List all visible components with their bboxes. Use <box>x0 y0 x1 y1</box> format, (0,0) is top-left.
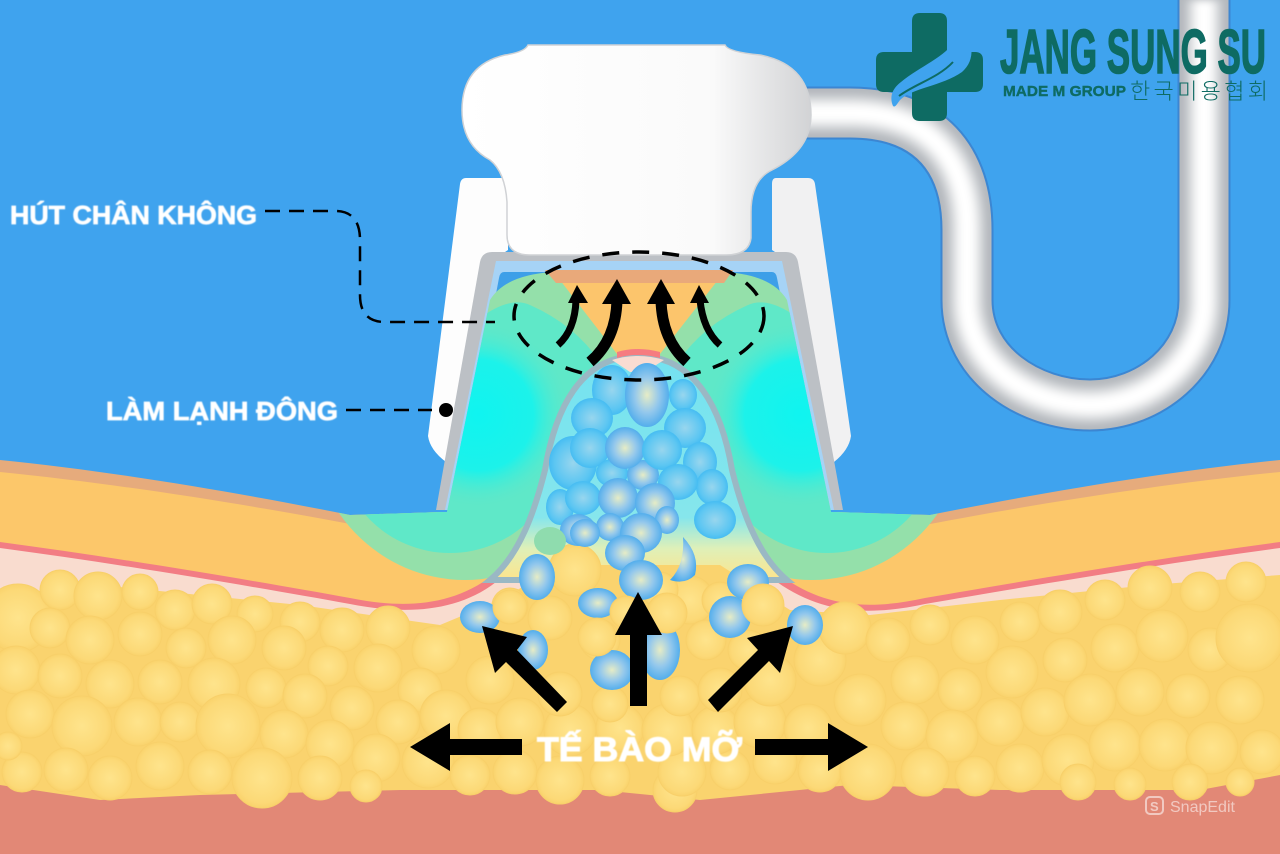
logo tagline: MADE M GROUP <box>1003 83 1126 100</box>
cold fat cells in bulge <box>546 363 736 546</box>
applicator cup frame <box>436 252 843 510</box>
suction arrows <box>558 279 720 362</box>
tissue bulge drawn into cup <box>490 349 787 580</box>
fat expansion arrows <box>410 592 868 771</box>
watermark: SnapEdit <box>1146 797 1235 816</box>
blue fat cells released into fat layer <box>460 513 823 690</box>
vacuum hose <box>800 0 1204 405</box>
skin layers <box>0 460 1280 854</box>
label: vacuum suction: HÚT CHÂN KHÔNG <box>10 200 257 230</box>
label: cryo freezing <box>106 396 453 426</box>
logo icon: cross with leaf <box>876 13 983 121</box>
applicator head <box>462 45 811 255</box>
applicator side wings <box>428 178 851 462</box>
logo: Jang Sung Su <box>876 13 1268 121</box>
watermark: SnapEdit: SnapEdit <box>1170 799 1235 816</box>
fat layer <box>0 544 1280 812</box>
orange suction wedge <box>545 270 733 354</box>
watermark: SnapEdit: S <box>1150 799 1159 814</box>
label: cryo freezing: LÀM LẠNH ĐÔNG <box>106 396 338 426</box>
cold aura in cup <box>447 272 831 512</box>
dashed suction ellipse <box>514 252 764 380</box>
logo korean text: 한국미용협회 <box>1130 79 1268 104</box>
label: vacuum suction <box>10 200 495 322</box>
cold aura in skin <box>338 512 938 580</box>
fat cells in front of blue cells <box>493 584 784 656</box>
label: fat cells: TẾ BÀO MỠ <box>537 731 742 769</box>
